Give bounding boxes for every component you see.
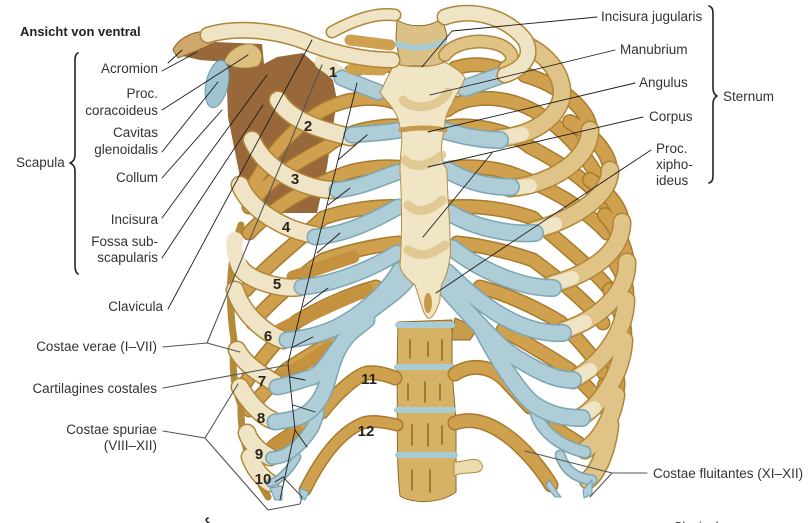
label: sternum: Sternum bbox=[723, 89, 774, 104]
label: xiphoid process: ideus bbox=[656, 173, 689, 188]
rib numbers: 6 bbox=[264, 328, 272, 345]
coracoid process bbox=[224, 44, 262, 68]
acromion bbox=[173, 32, 210, 58]
label: costae spuriae: Costae spuriae bbox=[66, 422, 157, 437]
rib numbers: 5 bbox=[273, 276, 281, 293]
posterior ribs, left bbox=[243, 65, 413, 447]
scapula bbox=[173, 32, 337, 213]
costal cartilages, right bbox=[442, 74, 592, 498]
label: costae fluitantes: Costae fluitantes (XI–XII) bbox=[653, 466, 803, 481]
label: coracoid process: coracoideus bbox=[85, 103, 158, 118]
sternum bbox=[380, 62, 465, 318]
sternal angle bbox=[401, 128, 445, 130]
rib numbers: 7 bbox=[258, 373, 266, 390]
left outer rim and lower rib shafts bbox=[230, 225, 367, 497]
ribs, left anterior bone bbox=[234, 62, 350, 483]
leader lines, right bbox=[422, 17, 651, 497]
upper vertebra bbox=[396, 18, 447, 66]
glenoid cavity bbox=[201, 58, 233, 110]
rib numbers: 2 bbox=[304, 118, 312, 135]
label: glenoid cavity: glenoidalis bbox=[94, 142, 158, 157]
label: cartilagines costales: Cartilagines costales bbox=[32, 381, 157, 396]
rib numbers bbox=[255, 64, 377, 488]
transverse process bbox=[454, 459, 482, 476]
vertebral column bbox=[397, 318, 482, 502]
floating rib 11 bbox=[322, 367, 530, 412]
label: angulus: Angulus bbox=[639, 75, 688, 90]
title: Ansicht von ventral bbox=[20, 24, 141, 39]
label: costae verae: Costae verae (I–VII) bbox=[36, 339, 157, 354]
rib numbers: 10 bbox=[255, 471, 271, 488]
label: costae spuriae: (VIII–XII) bbox=[104, 438, 157, 453]
rib numbers: 1 bbox=[329, 64, 337, 81]
label: fossa subscapularis: scapularis bbox=[97, 250, 158, 265]
clavicle, left bbox=[208, 14, 395, 70]
label: clavicula: Clavicula bbox=[108, 299, 163, 314]
label: xiphoid process: Proc. bbox=[656, 141, 688, 156]
ribs, right anterior bone bbox=[500, 47, 627, 480]
ribs, right lateral bend bbox=[525, 75, 627, 425]
rib numbers: 8 bbox=[257, 410, 265, 427]
floating rib 12 bbox=[300, 421, 561, 500]
bracket: sternum bbox=[709, 6, 717, 183]
label: collum: Collum bbox=[116, 170, 158, 185]
label: glenoid cavity: Cavitas bbox=[113, 125, 158, 140]
posterior ribs, right bbox=[443, 65, 613, 447]
rib numbers: 9 bbox=[255, 446, 263, 463]
clavicle, right and first rib bbox=[445, 13, 528, 75]
cropped bracket at bottom edge bbox=[206, 518, 209, 523]
label: xiphoid process: xipho- bbox=[656, 157, 693, 172]
bracket: scapula bbox=[70, 53, 78, 274]
rib numbers: 4 bbox=[282, 219, 291, 236]
label: incisura: Incisura bbox=[111, 212, 158, 227]
label: corpus: Corpus bbox=[649, 109, 693, 124]
label: fossa subscapularis: Fossa sub- bbox=[91, 234, 158, 249]
label: manubrium: Manubrium bbox=[620, 42, 688, 57]
leader lines, left bbox=[162, 40, 367, 510]
rib numbers: 12 bbox=[358, 423, 374, 440]
rib numbers: 11 bbox=[361, 371, 377, 388]
label: acromion: Acromion bbox=[101, 61, 158, 76]
costal cartilages, left bbox=[270, 78, 407, 500]
label: coracoid process: Proc. bbox=[126, 86, 158, 101]
label: scapula: Scapula bbox=[16, 155, 65, 170]
label: incisura jugularis: Incisura jugularis bbox=[601, 9, 703, 24]
rib numbers: 3 bbox=[291, 171, 299, 188]
